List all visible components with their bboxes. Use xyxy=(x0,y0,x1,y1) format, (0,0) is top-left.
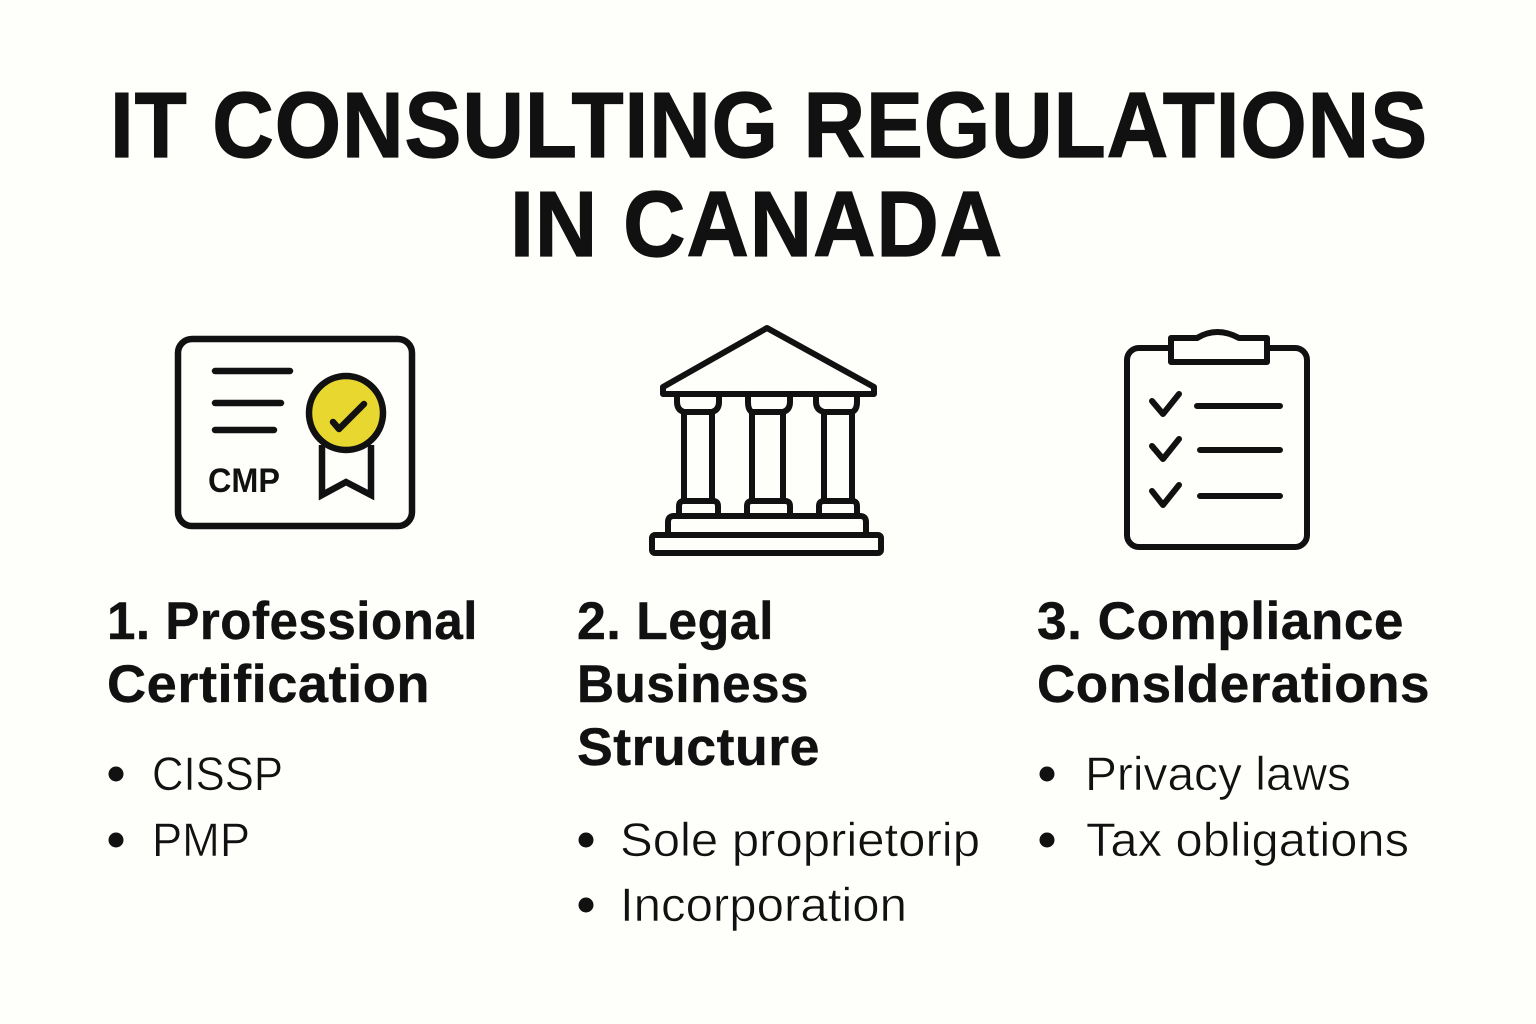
panel: legal business structure xyxy=(577,328,980,931)
title xyxy=(110,73,1428,276)
heading: compliance considerations: ConsIderations xyxy=(1037,655,1430,714)
list: certifications xyxy=(108,747,283,866)
heading: legal business structure: 2. Legal xyxy=(577,592,774,651)
list: business structures: Sole proprietorip xyxy=(620,813,980,866)
list: compliance items: Tax obligations xyxy=(1086,813,1409,866)
list: business structures xyxy=(578,813,980,931)
list: compliance items: Privacy laws xyxy=(1085,747,1351,800)
title: IN CANADA xyxy=(510,172,1003,276)
list: certifications: PMP xyxy=(152,813,250,866)
icon: clipboard checklist xyxy=(1127,332,1307,547)
heading: compliance considerations: 3. Compliance xyxy=(1037,592,1404,651)
icon: certificate with badge xyxy=(178,339,412,526)
heading: professional certification xyxy=(107,592,478,714)
icon: classical building xyxy=(652,328,881,553)
heading: professional certification: Certification xyxy=(107,655,430,714)
panel: compliance considerations xyxy=(1037,332,1430,866)
heading: legal business structure: Business xyxy=(577,655,809,714)
list: compliance items xyxy=(1040,747,1409,866)
heading: compliance considerations xyxy=(1037,592,1430,714)
heading: legal business structure: Structure xyxy=(577,718,820,777)
icon: certificate with badge: CMP xyxy=(208,462,280,500)
panel: professional certification xyxy=(107,339,478,866)
list: certifications: CISSP xyxy=(152,747,283,800)
heading: legal business structure xyxy=(577,592,820,777)
heading: professional certification: 1. Professional xyxy=(107,592,478,651)
title: IT CONSULTING REGULATIONS xyxy=(110,73,1428,177)
list: business structures: Incorporation xyxy=(620,878,907,931)
